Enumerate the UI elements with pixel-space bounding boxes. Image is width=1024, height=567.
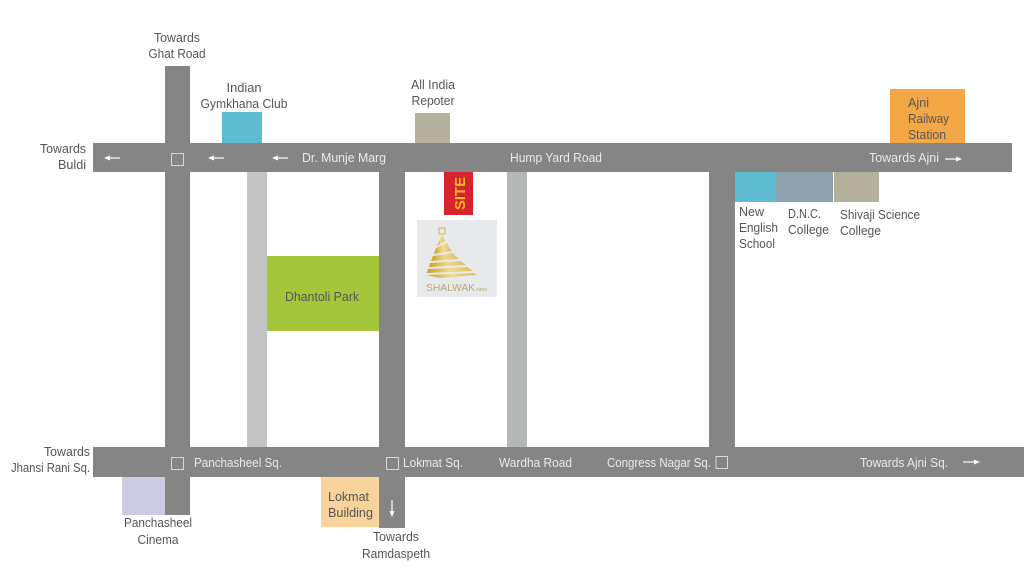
landmark: Ajni Railway Station: Railway xyxy=(908,111,949,126)
landmark: D.N.C. College: D.N.C. xyxy=(788,206,821,221)
landmark: Panchasheel Cinema: Panchasheel xyxy=(124,515,192,530)
road: vertical Ghat Road xyxy=(165,66,190,515)
landmark: New English School: English xyxy=(739,220,778,235)
road: Hump Yard Road xyxy=(93,143,1012,172)
label: Towards Buldi xyxy=(40,141,86,172)
landmark: Indian Gymkhana Club xyxy=(200,80,288,143)
label: Towards Buldi: Buldi xyxy=(58,157,86,172)
road labels: Dr. Munje Marg xyxy=(302,150,386,165)
landmark: Shivaji Science College: College xyxy=(840,223,881,238)
road labels: Towards Ajni xyxy=(869,150,939,165)
road: vertical Lokmat xyxy=(379,172,405,528)
landmark: All India Repoter: All India xyxy=(411,77,456,92)
landmark: New English School: School xyxy=(739,236,775,251)
site marker xyxy=(444,172,473,215)
road: Wardha Road xyxy=(93,447,1024,477)
logo: Shalwak: sites xyxy=(476,287,488,293)
landmark: Lokmat Building xyxy=(321,477,379,527)
road: vertical Congress Nagar xyxy=(709,172,735,447)
logo: Shalwak: SHALWAK xyxy=(426,283,475,294)
label: Towards Jhansi Rani Sq.: Jhansi Rani Sq. xyxy=(11,460,90,475)
label: Towards Ghat Road xyxy=(148,30,206,61)
road labels: Congress Nagar Sq. xyxy=(607,455,711,470)
road: Wardha side lane xyxy=(507,172,527,447)
landmark: New English School xyxy=(735,172,778,251)
landmark: Ajni Railway Station: Station xyxy=(908,127,946,142)
road labels: Towards Ajni Sq. xyxy=(860,455,948,470)
landmark: Indian Gymkhana Club: Indian xyxy=(226,80,262,95)
landmark: All India Repoter: Repoter xyxy=(412,93,455,108)
road labels: Hump Yard Road xyxy=(510,150,602,165)
road labels: Wardha Road xyxy=(499,455,572,470)
landmark: Ajni Railway Station: Ajni xyxy=(908,95,929,110)
label: Towards Jhansi Rani Sq. xyxy=(11,444,90,475)
landmark: Ajni Railway Station xyxy=(890,89,965,143)
road labels: Panchasheel Sq. xyxy=(194,455,282,470)
road labels: Lokmat Sq. xyxy=(403,455,463,470)
label: Towards Ramdaspeth xyxy=(362,529,430,561)
road labels xyxy=(194,150,948,470)
landmark: Indian Gymkhana Club: Gymkhana Club xyxy=(200,96,288,111)
label: Towards Ramdaspeth: Ramdaspeth xyxy=(362,546,430,561)
label: Towards Ghat Road: Ghat Road xyxy=(148,46,206,61)
landmark: Panchasheel Cinema xyxy=(122,477,192,547)
label: Towards Buldi: Towards xyxy=(40,141,86,156)
landmark: Lokmat Building: Lokmat xyxy=(328,489,369,504)
landmark: D.N.C. College: College xyxy=(788,222,829,237)
label: Towards Jhansi Rani Sq.: Towards xyxy=(44,444,90,459)
site marker: SITE xyxy=(453,177,469,210)
landmark: Shivaji Science College xyxy=(834,172,920,238)
road: Dhantoli side lane xyxy=(247,172,267,447)
landmark: D.N.C. College xyxy=(776,172,833,237)
label: Towards Ghat Road: Towards xyxy=(154,30,200,45)
landmark: Dhantoli Park xyxy=(267,256,379,331)
landmark: Panchasheel Cinema: Cinema xyxy=(138,532,179,547)
arrows xyxy=(104,156,980,517)
square markers xyxy=(172,154,728,470)
landmark: New English School: New xyxy=(739,204,765,219)
label: Towards Ramdaspeth: Towards xyxy=(373,529,419,544)
landmark: All India Repoter xyxy=(411,77,456,143)
landmark: Dhantoli Park: Dhantoli Park xyxy=(285,289,359,304)
landmark: Shivaji Science College: Shivaji Science xyxy=(840,207,920,222)
landmark: Lokmat Building: Building xyxy=(328,505,373,520)
logo: Shalwak xyxy=(417,220,497,297)
